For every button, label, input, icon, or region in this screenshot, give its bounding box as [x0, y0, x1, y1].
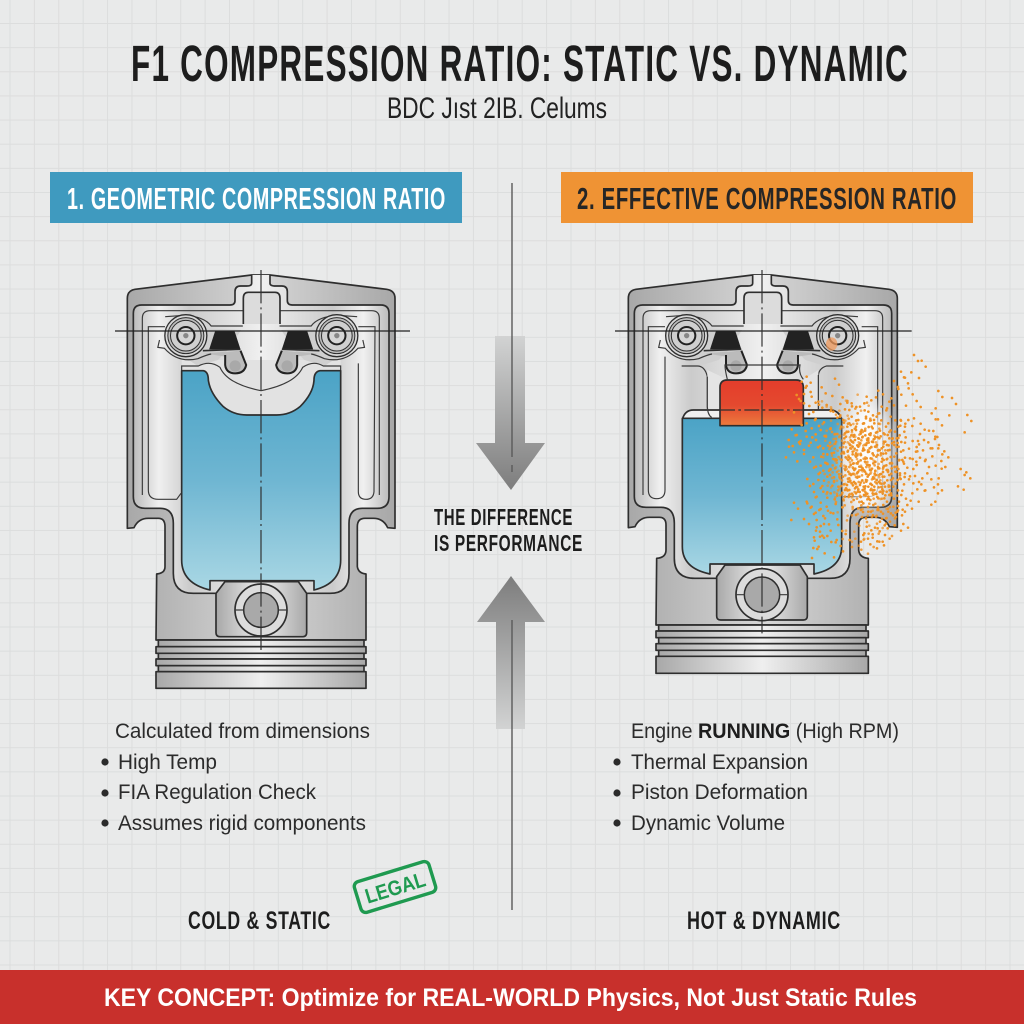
heat spot on valve [826, 337, 837, 351]
text block: effective notes: Dynamic Volume [631, 812, 785, 835]
diagram: hot dynamic piston [615, 270, 971, 673]
center divider line [511, 183, 513, 910]
footer banner: KEY CONCEPT: Optimize for REAL-WORLD Physics, Not Just Static Rules [104, 984, 917, 1012]
text block: effective notes: Piston Deformation [631, 781, 808, 804]
text block: geometric notes: Assumes rigid components [118, 812, 366, 835]
arrow: down [476, 336, 545, 490]
hot compressed gas block [720, 380, 803, 426]
label: cold and static: COLD & STATIC [188, 907, 331, 935]
text block: effective notes: Thermal Expansion [631, 751, 808, 774]
diagram: cold static piston [115, 270, 410, 688]
heat haze [843, 407, 893, 507]
center caption: THE DIFFERENCE [434, 504, 573, 530]
footer banner [0, 970, 1024, 1024]
arrow: up [477, 576, 545, 729]
text block: effective notes: Engine RUNNING (High RPM) [631, 720, 899, 743]
label: hot and dynamic: HOT & DYNAMIC [687, 907, 841, 935]
text block: effective notes [613, 720, 899, 835]
text block: geometric notes: Calculated from dimensions [115, 720, 370, 743]
center caption [434, 504, 583, 556]
center caption: IS PERFORMANCE [434, 530, 583, 556]
stamp: legal: LEGAL [362, 868, 429, 908]
panel header: geometric compression ratio: 1. GEOMETRIC COMPRESSION RATIO [67, 181, 446, 216]
panel header: effective compression ratio [561, 172, 973, 223]
panel header: geometric compression ratio [50, 172, 462, 223]
orange particle spray [786, 355, 971, 558]
text block: geometric notes: FIA Regulation Check [118, 781, 316, 804]
subtitle: BDC Jıst 2IB. Celums [387, 92, 607, 125]
text block: geometric notes: High Temp [118, 751, 217, 774]
text block: geometric notes [101, 720, 370, 835]
